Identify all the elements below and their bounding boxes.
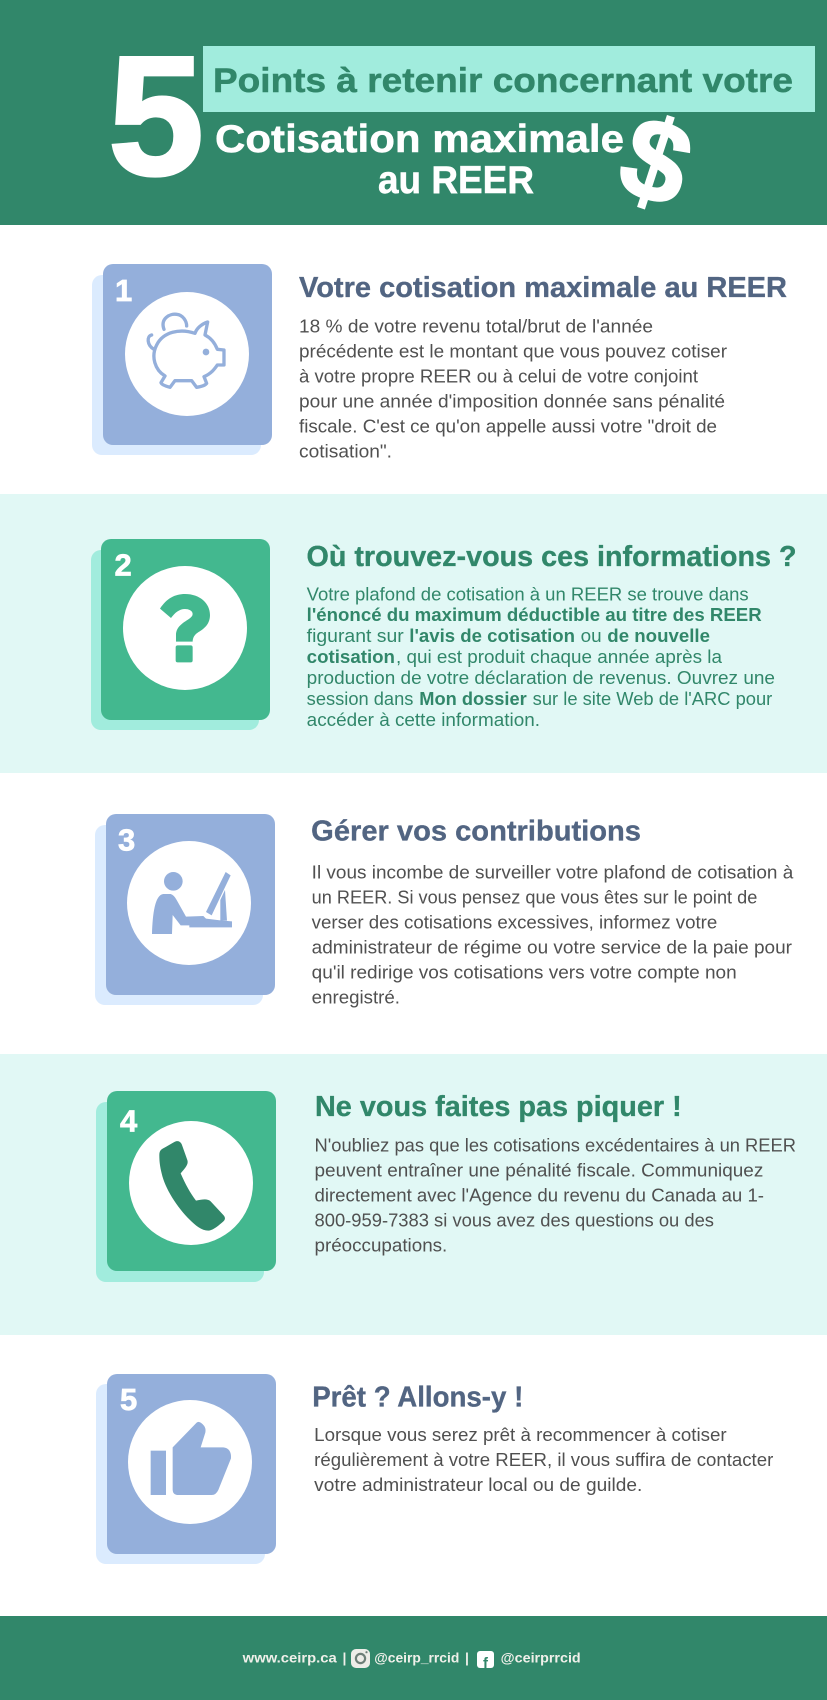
panel: section 3 bbox=[0, 773, 827, 1054]
body 1: précédente est le montant que vous pouvez cotiser bbox=[299, 341, 727, 361]
body 2: production de votre déclaration de revenus. Ouvrez une bbox=[307, 668, 775, 688]
panel: section 1 bbox=[0, 225, 827, 494]
body 2: , qui est produit chaque année après la bbox=[396, 647, 723, 667]
body 2: sur le site Web de l'ARC pour bbox=[533, 689, 772, 709]
body 5: Lorsque vous serez prêt à recommencer à cotiser bbox=[314, 1425, 727, 1445]
body 4: peuvent entraîner une pénalité fiscale. Communiquez bbox=[314, 1161, 763, 1181]
title line 2: Cotisation maximale bbox=[215, 118, 624, 161]
number 1: 1 bbox=[115, 273, 132, 308]
number 5: 5 bbox=[120, 1382, 137, 1417]
body 1: pour une année d'imposition donnée sans pénalité bbox=[299, 391, 725, 411]
heading 1: Votre cotisation maximale au REER bbox=[299, 272, 787, 304]
heading 4: Ne vous faites pas piquer ! bbox=[315, 1091, 682, 1123]
body 1 bbox=[299, 316, 727, 461]
body 4: 800-959-7383 si vous avez des questions ou des bbox=[314, 1211, 714, 1231]
body 2: l'énoncé du maximum déductible au titre des REER bbox=[307, 605, 762, 625]
icon: instagram bbox=[351, 1649, 370, 1668]
title band bbox=[203, 46, 815, 112]
website: www.ceirp.ca bbox=[242, 1649, 337, 1665]
body 4: directement avec l'Agence du revenu du Canada au 1- bbox=[314, 1186, 764, 1206]
body 1: 18 % de votre revenu total/brut de l'année bbox=[299, 316, 653, 336]
icon: thumbs up bbox=[151, 1422, 231, 1495]
icon: piggy bank bbox=[148, 314, 224, 387]
body 3: enregistré. bbox=[312, 987, 400, 1007]
body 5 bbox=[314, 1425, 773, 1495]
title line 1: Points à retenir concernant votre bbox=[213, 62, 793, 100]
card 5 bbox=[96, 1374, 276, 1564]
number 4: 4 bbox=[120, 1104, 138, 1139]
card 2 bbox=[91, 539, 270, 730]
body 3: qu'il redirige vos cotisations vers votre compte non bbox=[312, 962, 737, 982]
body 4: N'oubliez pas que les cotisations excédentaires à un REER bbox=[314, 1136, 796, 1156]
body 4: préoccupations. bbox=[314, 1236, 447, 1256]
body 1: cotisation". bbox=[299, 441, 392, 461]
number 2: 2 bbox=[114, 548, 132, 583]
number 3: 3 bbox=[118, 823, 135, 858]
panel: section 5 bbox=[0, 1335, 827, 1616]
body 1: fiscale. C'est ce qu'on appelle aussi votre "droit de bbox=[299, 416, 717, 436]
body 2 bbox=[307, 584, 775, 730]
panel: footer bbox=[0, 1616, 827, 1700]
icon: facebook bbox=[477, 1651, 494, 1672]
big number 5: 5 bbox=[108, 22, 204, 212]
separator: | bbox=[342, 1649, 346, 1665]
title line 3: au REER bbox=[378, 159, 534, 202]
body 2: cotisation bbox=[307, 647, 395, 667]
body 4 bbox=[314, 1136, 796, 1256]
icon: person at computer bbox=[152, 872, 232, 934]
facebook handle: @ceirprrcid bbox=[501, 1649, 581, 1665]
body 2: de nouvelle bbox=[607, 626, 710, 646]
heading 5: Prêt ? Allons-y ! bbox=[312, 1382, 523, 1414]
card 1 bbox=[92, 264, 272, 455]
body 2: l'avis de cotisation bbox=[409, 626, 575, 646]
body 3: Il vous incombe de surveiller votre plafond de cotisation à bbox=[312, 862, 794, 882]
body 3: un REER. Si vous pensez que vous êtes sur le point de bbox=[312, 887, 757, 907]
heading 2: Où trouvez-vous ces informations ? bbox=[306, 541, 796, 573]
body 3: verser des cotisations excessives, informez votre bbox=[312, 912, 717, 932]
panel: section 2 bbox=[0, 494, 827, 773]
icon: telephone bbox=[159, 1141, 225, 1231]
instagram handle: @ceirp_rrcid bbox=[374, 1649, 459, 1665]
panel: section 4 bbox=[0, 1054, 827, 1335]
panel: header bbox=[0, 0, 827, 233]
separator: | bbox=[465, 1649, 469, 1665]
body 2: ou bbox=[581, 626, 602, 646]
card 3 bbox=[95, 814, 275, 1005]
body 1: à votre propre REER ou à celui de votre conjoint bbox=[299, 366, 698, 386]
heading 3: Gérer vos contributions bbox=[311, 816, 641, 848]
icon: question mark bbox=[160, 594, 210, 662]
icon: dollar sign: $ bbox=[605, 89, 707, 233]
body 3 bbox=[312, 862, 794, 1007]
body 2: accéder à cette information. bbox=[307, 710, 540, 730]
icon: facebook: f bbox=[483, 1655, 489, 1672]
body 2: Votre plafond de cotisation à un REER se trouve dans bbox=[307, 584, 749, 604]
body 5: votre administrateur local ou de guilde. bbox=[314, 1475, 642, 1495]
body 3: administrateur de régime ou votre service de la paie pour bbox=[312, 937, 792, 957]
body 2: figurant sur bbox=[307, 626, 404, 646]
card 4 bbox=[96, 1091, 276, 1282]
body 2: session dans bbox=[307, 689, 413, 709]
body 2: Mon dossier bbox=[419, 689, 527, 709]
body 5: régulièrement à votre REER, il vous suffira de contacter bbox=[314, 1450, 773, 1470]
